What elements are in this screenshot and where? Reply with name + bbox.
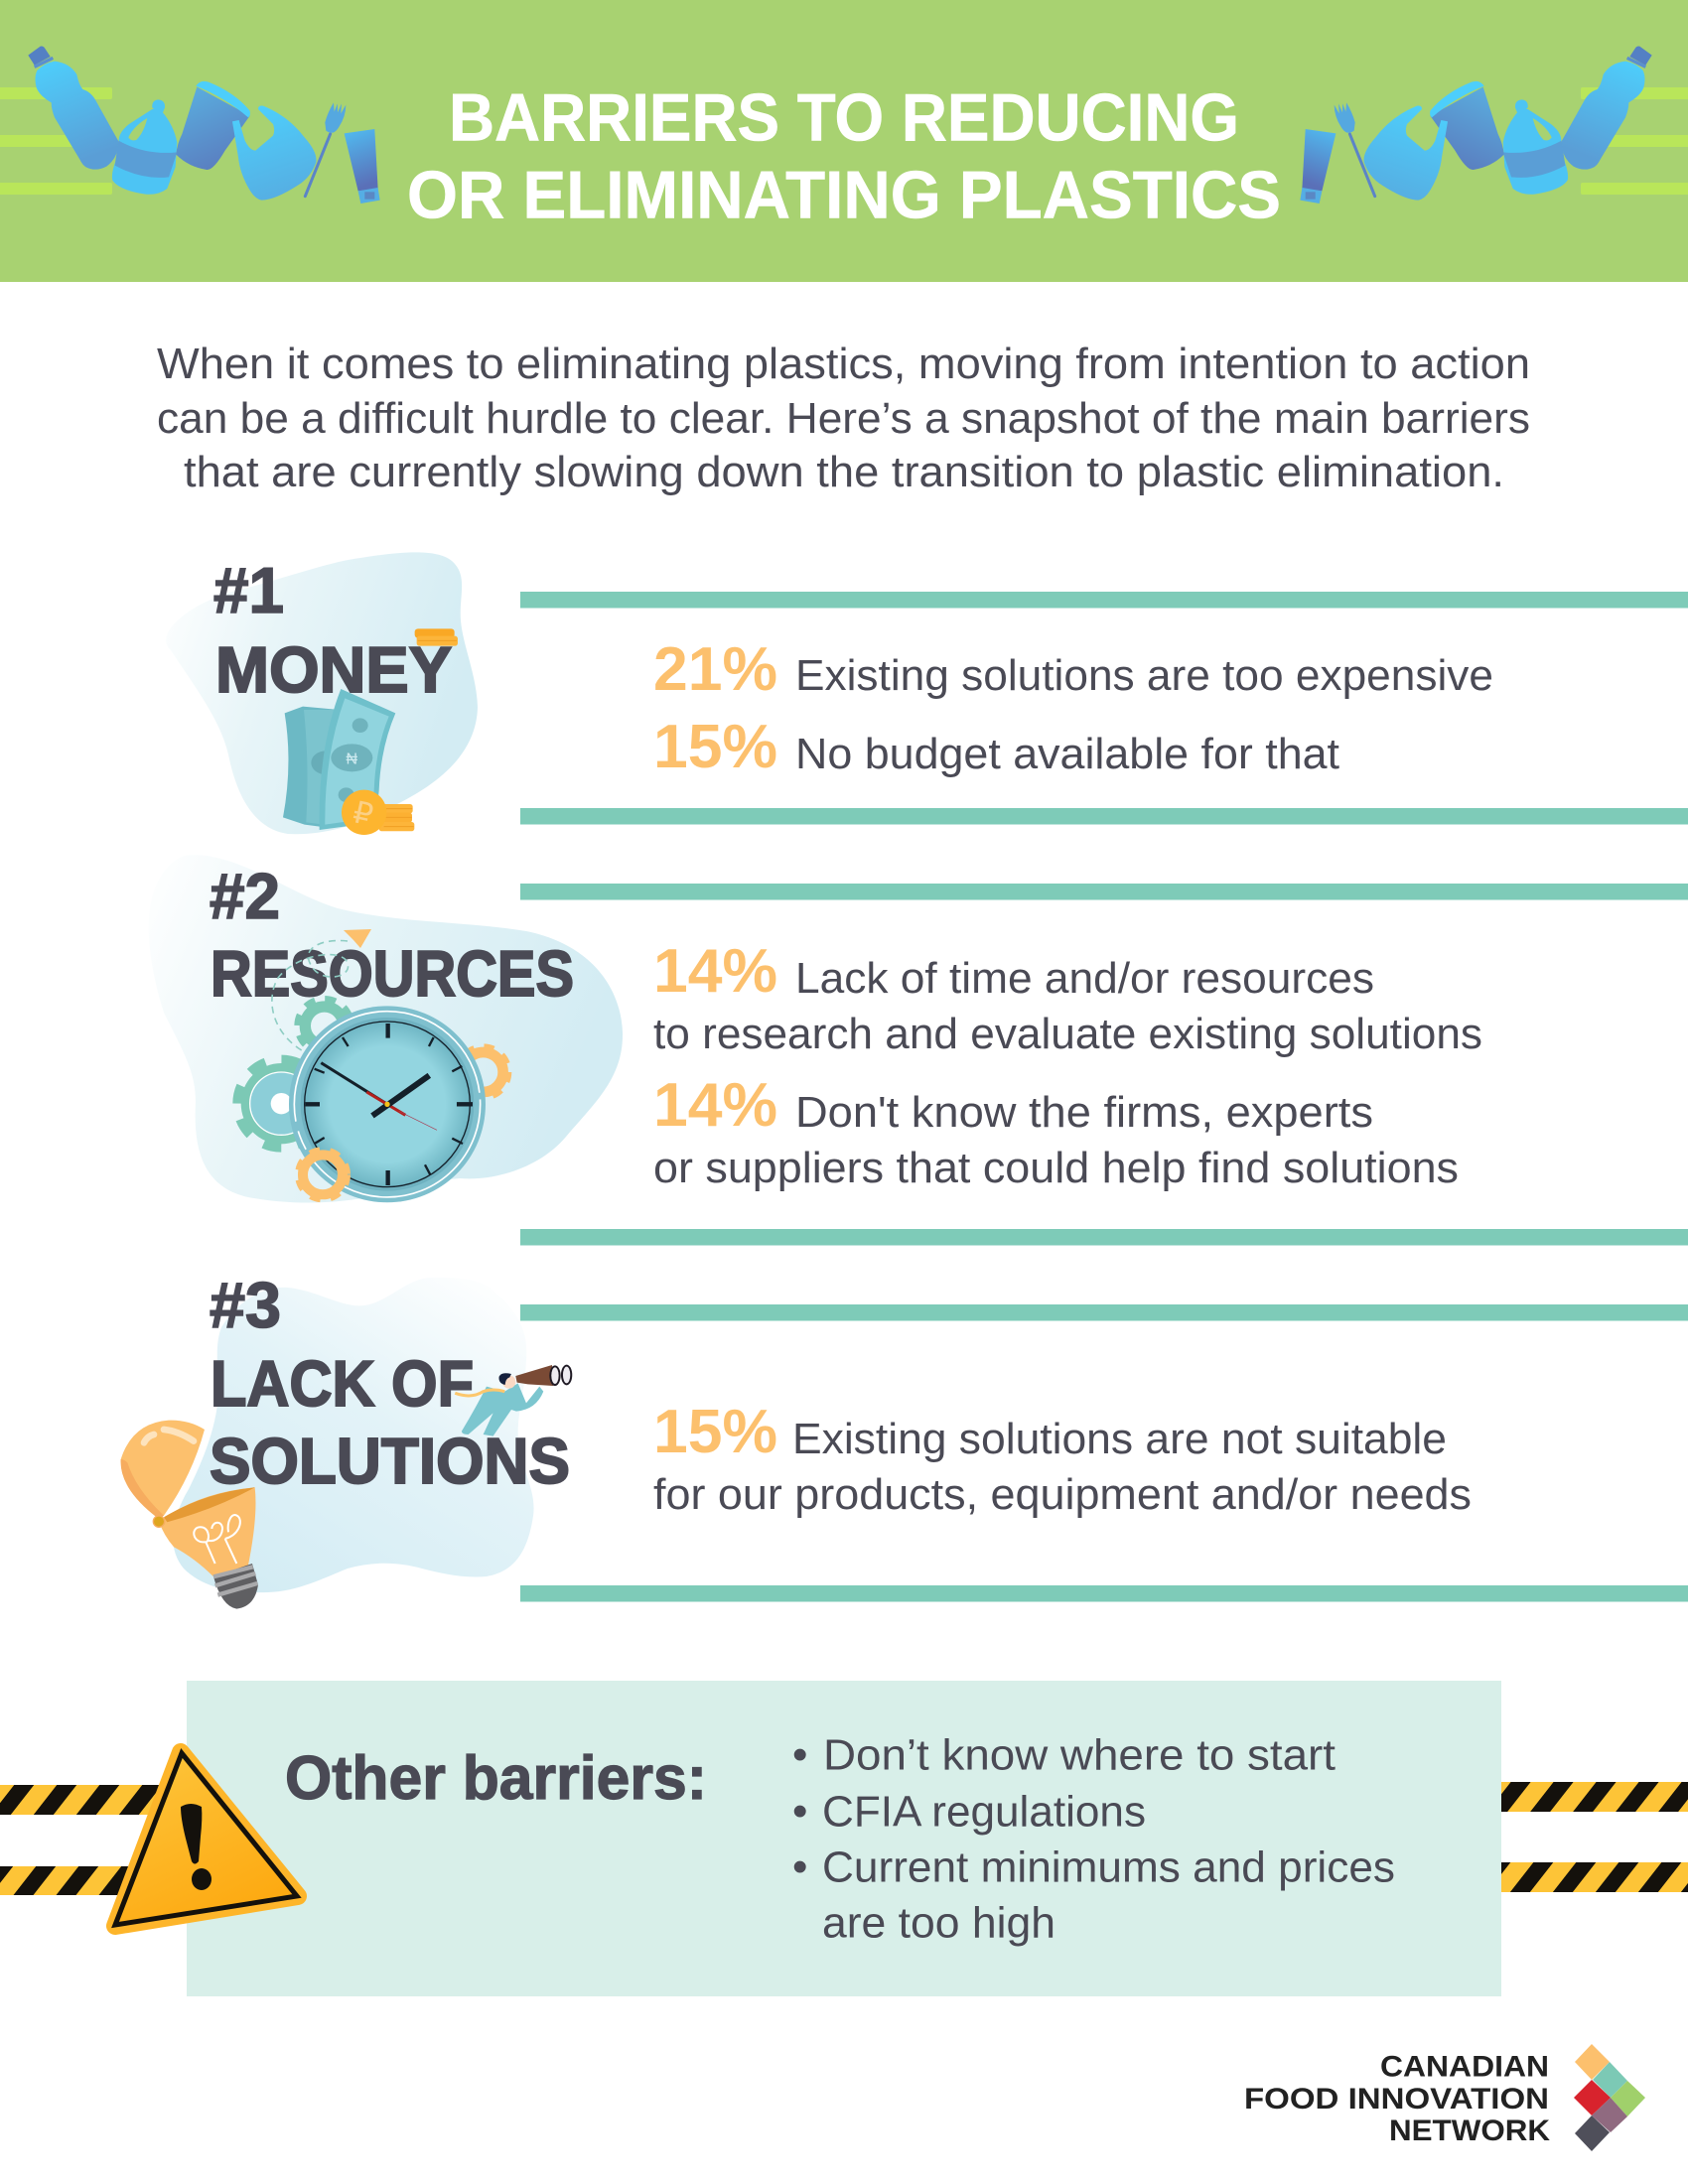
stat: don't know firms: 14%: [653, 1071, 777, 1140]
blob background: [173, 1278, 534, 1592]
stat: too expensive: [653, 635, 1493, 704]
bullet list: are too high: [822, 1898, 1055, 1948]
panel: resources: [149, 855, 623, 1202]
bullet list: CFIA regulations: [822, 1787, 1146, 1837]
stat: lack of time: Lack of time and/or resources: [795, 954, 1374, 1003]
bullet list: •: [792, 1843, 807, 1891]
stat: not suitable: 15%: [653, 1398, 777, 1466]
logo wordmark: FOOD INNOVATION: [1244, 2083, 1549, 2116]
intro text: [157, 340, 1530, 496]
divider bar: [520, 1229, 1688, 1245]
hazard tape right: [1501, 1782, 1688, 1892]
stat: not suitable: Existing solutions are not suitable: [792, 1415, 1447, 1463]
panel: lack of solutions: [121, 1269, 572, 1609]
divider bar: [520, 808, 1688, 824]
bullet list: •: [792, 1730, 807, 1779]
icon: warning triangle: [115, 1752, 298, 1926]
bullet list: Don’t know where to start: [823, 1731, 1336, 1779]
icon: plastic items left: [28, 47, 380, 204]
hazard tape left: [0, 1785, 169, 1895]
header stripes: [0, 87, 1688, 195]
stat: too expensive: 21%: [653, 635, 777, 704]
blob background: [149, 855, 623, 1202]
icon: banknotes and coins: [283, 628, 458, 835]
header band: [0, 0, 1688, 282]
stat: lack of time: [653, 937, 1482, 1058]
heading: other barriers: Other barriers:: [285, 1744, 707, 1813]
bullet list: [792, 1730, 1395, 1948]
logo wordmark: [1244, 2051, 1550, 2147]
background box: [187, 1681, 1501, 1996]
logo wordmark: CANADIAN: [1380, 2051, 1549, 2083]
heading: lack of solutions: [210, 1347, 570, 1497]
title: BARRIERS TO REDUCING: [449, 79, 1239, 155]
heading: money: MONEY: [215, 633, 452, 706]
logo: [1244, 2044, 1645, 2151]
stat: lack of time: 14%: [653, 937, 777, 1006]
logo mark: [1574, 2044, 1645, 2151]
divider bar: [520, 592, 1688, 608]
stat: not suitable: for our products, equipment and/or needs: [653, 1470, 1472, 1519]
stat: don't know firms: Don't know the firms, experts: [795, 1088, 1373, 1137]
divider bar: [520, 1304, 1688, 1320]
panel: money: [166, 552, 478, 835]
panel: other barriers: [187, 1681, 1501, 1996]
stat: too expensive: Existing solutions are too expensive: [795, 651, 1493, 700]
bullet list: •: [792, 1787, 807, 1836]
intro text: When it comes to eliminating plastics, moving from intention to action: [157, 340, 1530, 388]
stat: don't know firms: or suppliers that could help find solutions: [653, 1144, 1459, 1192]
icon: open light bulb: [121, 1421, 258, 1609]
stat: don't know firms: [653, 1071, 1459, 1192]
icon: plastic items right: [1300, 47, 1652, 204]
rank number: #3: [210, 1269, 281, 1341]
title: OR ELIMINATING PLASTICS: [407, 157, 1281, 232]
stat: no budget: No budget available for that: [795, 730, 1339, 778]
icon: clock and gears: [238, 1000, 508, 1202]
logo wordmark: NETWORK: [1389, 2115, 1550, 2147]
blob background: [166, 552, 478, 834]
divider bar: [520, 884, 1688, 899]
title: [407, 79, 1281, 232]
intro text: that are currently slowing down the transition to plastic elimination.: [184, 448, 1504, 496]
stat: no budget: [653, 713, 1339, 781]
intro text: can be a difficult hurdle to clear. Here’s a snapshot of the main barriers: [157, 394, 1530, 443]
heading: lack of solutions: LACK OF: [211, 1347, 474, 1420]
stat: not suitable: [653, 1398, 1472, 1519]
icon: banknotes and coins: ₦: [347, 751, 358, 767]
bullet list: Current minimums and prices: [822, 1843, 1395, 1892]
rank number: #1: [213, 554, 284, 626]
heading: lack of solutions: SOLUTIONS: [210, 1425, 570, 1497]
divider bar: [520, 1585, 1688, 1602]
heading: resources: RESOURCES: [211, 937, 574, 1010]
icon: paper plane with dashed trail: [272, 929, 371, 1052]
icon: banknotes and coins: ₽: [351, 795, 376, 833]
icon: man with binoculars: [455, 1365, 572, 1436]
stat: no budget: 15%: [653, 713, 777, 781]
rank number: #2: [210, 860, 280, 932]
stat: lack of time: to research and evaluate existing solutions: [653, 1010, 1482, 1058]
